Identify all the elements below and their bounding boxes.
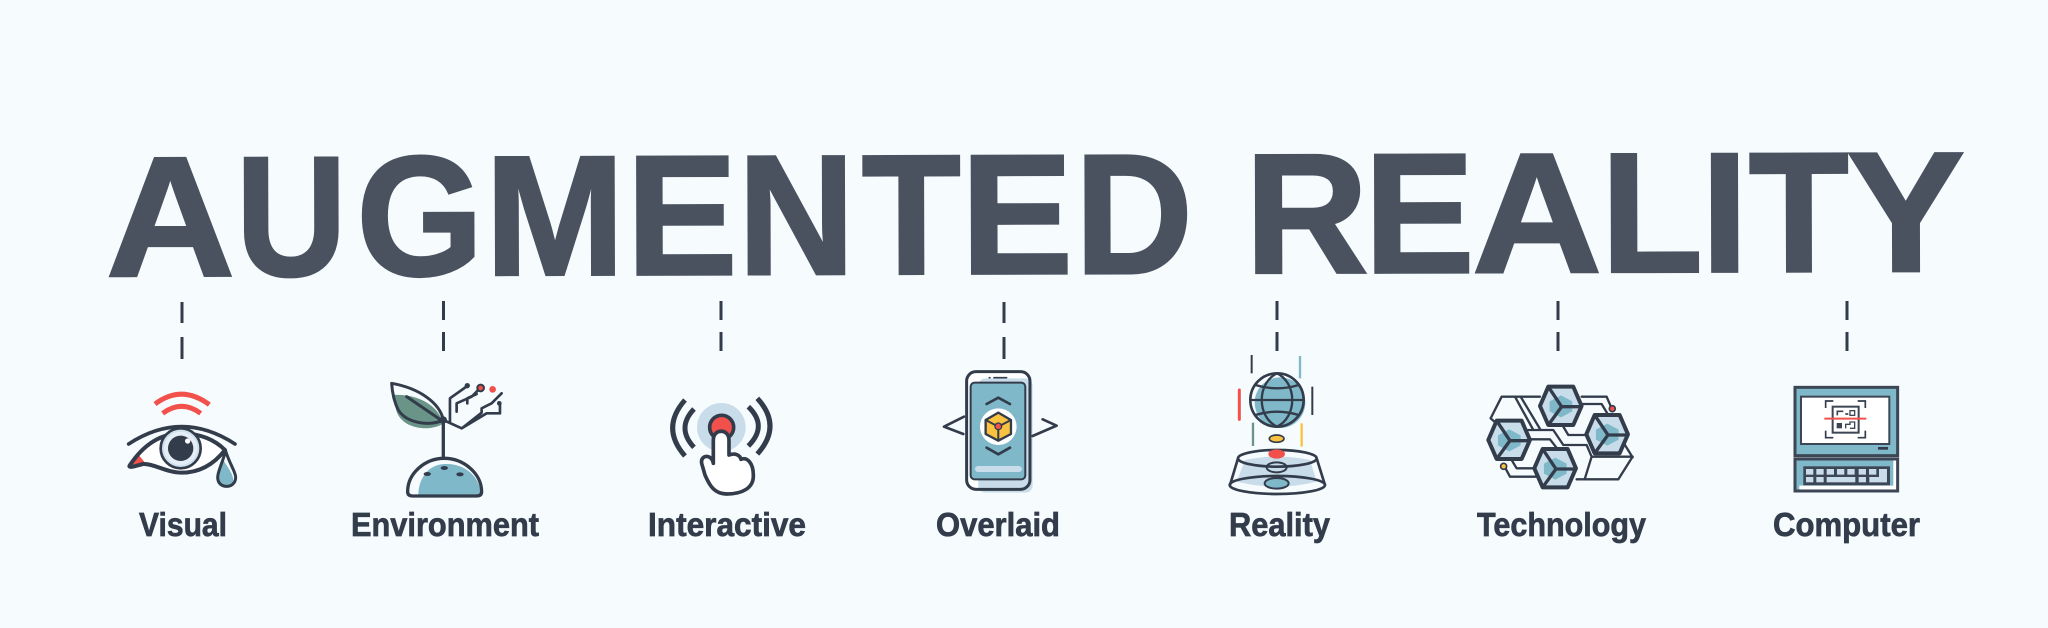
title: G: [356, 121, 484, 312]
connector: technology: [1556, 301, 1560, 351]
title: E: [1364, 118, 1475, 310]
icon: touch button: [673, 398, 770, 494]
title: E: [626, 120, 738, 312]
title: U: [236, 121, 347, 313]
title: N: [738, 120, 855, 311]
title: I: [1701, 118, 1749, 309]
connector: computer: [1846, 301, 1848, 351]
label: Visual: Visual: [139, 506, 227, 543]
icon: computer with QR scan: [1795, 387, 1898, 491]
title: L: [1601, 118, 1703, 309]
icon: phone with AR cube: [944, 372, 1057, 493]
icon: plant with circuit leaf: [392, 383, 502, 496]
icon: blockchain cubes: [1488, 387, 1633, 487]
icon: hologram globe: [1230, 355, 1325, 494]
title: A: [106, 122, 235, 313]
title: D: [1075, 119, 1193, 310]
title: Y: [1847, 117, 1965, 308]
label: Environment: Environment: [351, 506, 539, 543]
connector: environment: [442, 301, 445, 351]
title: M: [485, 121, 625, 312]
label: Reality: Reality: [1229, 506, 1331, 543]
label: Computer: Computer: [1773, 506, 1920, 543]
connector: reality: [1276, 301, 1278, 351]
title: T: [862, 120, 961, 311]
icon: eye with tear: [129, 394, 236, 488]
label: Interactive: Interactive: [648, 506, 806, 543]
connector: interactive: [720, 301, 722, 351]
label: Overlaid: Overlaid: [936, 506, 1060, 543]
label: Technology: Technology: [1477, 506, 1647, 543]
connector: overlaid: [1002, 302, 1006, 359]
title: A: [1472, 118, 1602, 309]
connector: visual: [180, 302, 184, 359]
title: R: [1245, 119, 1369, 310]
title: E: [961, 119, 1073, 311]
title: T: [1749, 117, 1849, 309]
